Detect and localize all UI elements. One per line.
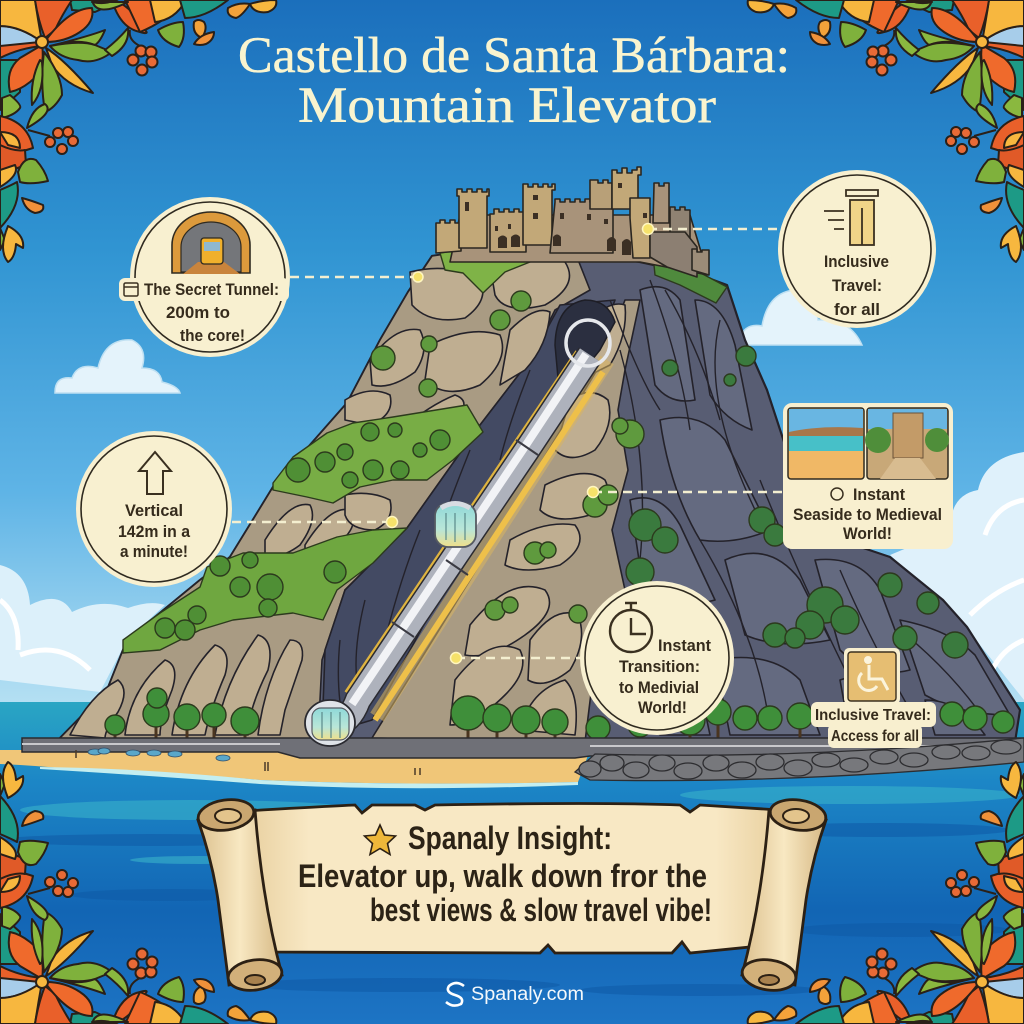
rock cracks — [338, 280, 985, 730]
green vegetation — [105, 245, 1014, 740]
callout: inclusive travel: Travel: — [832, 276, 882, 295]
upper green terrace — [273, 405, 483, 503]
connector dots — [386, 224, 654, 664]
beach and promenade — [0, 738, 1024, 788]
icon: small calendar — [124, 283, 138, 296]
right low walls — [650, 232, 697, 277]
label chip — [119, 278, 289, 301]
callout: inclusive travel: Inclusive — [824, 252, 889, 271]
sea — [0, 702, 1024, 1024]
title: Castello de Santa Bárbara: — [238, 28, 790, 84]
scroll banner: Elevator up, walk down fror the — [298, 858, 707, 894]
tube body — [333, 355, 590, 726]
label: inclusive travel access — [811, 702, 936, 748]
upper cabin — [435, 503, 476, 547]
clouds — [0, 290, 1024, 700]
callout: instant transition: Transition: — [619, 657, 700, 676]
lower bend of tube — [333, 355, 590, 726]
right roll — [740, 796, 828, 994]
callout: vertical: Vertical — [125, 501, 183, 520]
parchment body — [245, 804, 780, 953]
callout: inclusive travel — [778, 170, 936, 328]
curtain wall backing — [450, 215, 708, 275]
cloud bottom left — [0, 565, 165, 692]
dark cliff behind shaft — [322, 300, 615, 735]
icon: spanaly logo — [446, 983, 464, 1006]
callout: inclusive travel: for all — [834, 300, 880, 319]
summit grass — [440, 245, 557, 293]
tube highlight — [352, 354, 586, 704]
panel: seaside to medieval: World! — [843, 524, 892, 543]
scroll banner — [196, 796, 828, 994]
lighter slate slabs — [630, 287, 1010, 735]
wall with arches — [490, 207, 526, 252]
slate silhouette — [60, 246, 1020, 742]
bushes on terraces — [155, 423, 450, 640]
cloud left — [55, 340, 180, 393]
panel: seaside to medieval — [783, 403, 953, 549]
callout: secret tunnel: The Secret Tunnel: — [144, 280, 279, 299]
promenade wall — [22, 738, 1024, 758]
castle — [436, 167, 709, 277]
floral corner bottom left — [0, 762, 276, 1024]
panel: seaside to medieval: Seaside to Medieval — [793, 505, 942, 524]
tower 1 — [457, 189, 489, 248]
picture: medieval gate — [865, 408, 949, 479]
picture: seaside — [788, 408, 864, 479]
right gold rail — [375, 372, 603, 720]
left roll — [196, 796, 284, 994]
icon: elevator — [824, 190, 878, 245]
label: inclusive travel access: Access for all — [831, 728, 919, 745]
tube joints — [392, 440, 538, 637]
icon: tunnel with train — [172, 212, 250, 274]
breakwater rocks — [575, 738, 1024, 781]
cloud right — [890, 452, 1024, 700]
callout: instant transition: to Medivial — [619, 678, 699, 697]
background sky — [0, 0, 1024, 705]
golden light glow — [377, 360, 607, 717]
callout: secret tunnel: 200m to — [166, 303, 230, 322]
shrubs on rock — [371, 291, 644, 623]
callout: secret tunnel — [119, 197, 290, 357]
panel: seaside to medieval: Instant — [853, 485, 905, 504]
tunnel mouth — [555, 300, 615, 400]
tan rock right of shaft — [372, 300, 640, 742]
tower 2 — [523, 184, 555, 245]
callout: vertical: a minute! — [120, 542, 188, 561]
icon: stopwatch — [610, 603, 652, 652]
callout: vertical — [76, 431, 232, 587]
mountain — [60, 246, 1020, 742]
dark trees on slate — [626, 346, 968, 658]
light tan slabs — [70, 259, 625, 738]
callout: instant transition: World! — [638, 698, 687, 717]
scroll banner: Spanaly Insight: — [408, 820, 612, 856]
central wall — [550, 199, 613, 253]
callout: instant transition — [580, 581, 734, 735]
floral corner top left — [0, 0, 276, 262]
callout: instant transition: Instant — [658, 636, 711, 655]
left low tower — [436, 220, 463, 253]
floral corner top right — [748, 0, 1024, 262]
callout: secret tunnel: the core! — [180, 326, 245, 345]
floral corner bottom right — [748, 762, 1024, 1024]
shoreline trees — [115, 725, 800, 740]
top tube ring — [566, 320, 610, 366]
lower green terrace — [123, 528, 407, 653]
title — [238, 28, 790, 134]
elevator shaft — [305, 300, 615, 746]
towers upper right — [590, 180, 612, 209]
icon: wheelchair access — [844, 648, 900, 704]
icon: up arrow — [139, 452, 171, 494]
cloud behind summit — [738, 290, 862, 345]
label: inclusive travel access: Inclusive Travel: — [815, 707, 931, 724]
scroll banner: best views & slow travel vibe! — [370, 892, 712, 928]
dashed connector lines — [232, 229, 784, 658]
tan rock left of shaft — [60, 246, 590, 740]
lower cabin — [305, 700, 355, 746]
title: Mountain Elevator — [298, 78, 716, 134]
beach umbrellas — [88, 748, 230, 761]
brand footer: Spanaly.com — [471, 984, 584, 1005]
beach — [0, 750, 590, 784]
icon: star — [364, 825, 396, 854]
left gold rail — [347, 352, 578, 693]
callout: vertical: 142m in a — [118, 522, 190, 541]
